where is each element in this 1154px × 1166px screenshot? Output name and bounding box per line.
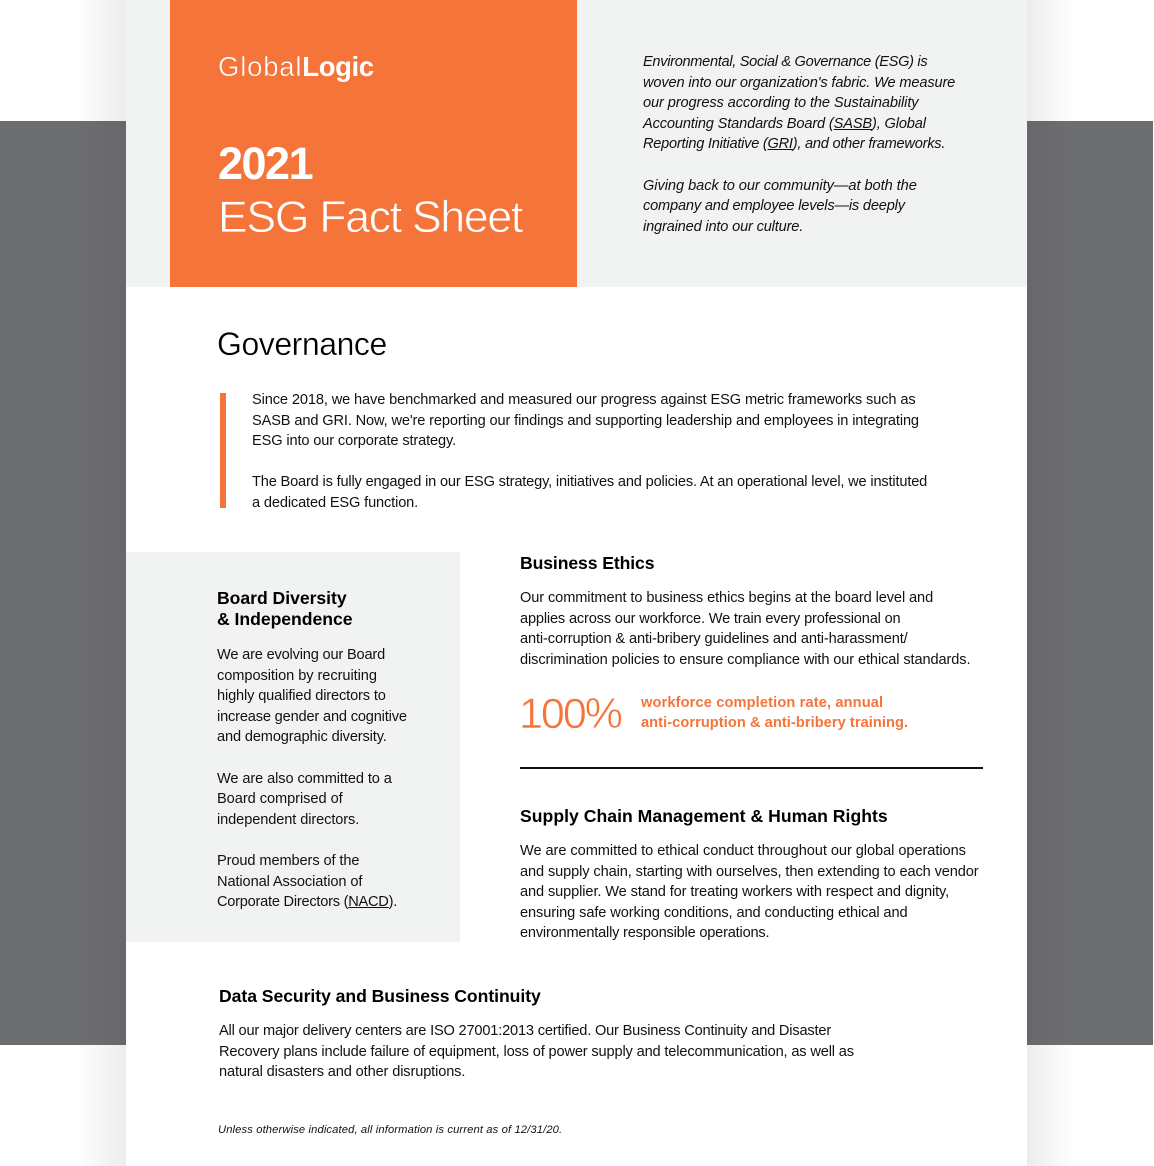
intro text [642,54,955,235]
supply chain text: and supplier. We stand for treating workers with respect and dignity, [520,884,949,900]
page shadows [0,0,1154,121]
board diversity text: Board comprised of [217,791,343,807]
logo: GlobalLogic [218,51,374,82]
supply chain text: environmentally responsible operations. [520,925,769,941]
governance text: Since 2018, we have benchmarked and measured our progress against ESG metric frameworks such as [252,392,916,408]
title [218,138,523,242]
governance text: The Board is fully engaged in our ESG strategy, initiatives and policies. At an operational level, we instituted [252,474,927,490]
heading: data security: Data Security and Business Continuity [219,986,541,1006]
business ethics text: anti-corruption & anti-bribery guidelines and anti-harassment/ [520,631,908,647]
heading: board diversity: & Independence [217,609,352,629]
panel: header orange [170,0,577,287]
governance text: SASB and GRI. Now, we're reporting our findings and supporting leadership and employees in integrating [252,413,919,429]
governance text: ESG into our corporate strategy. [252,433,456,449]
board diversity text: independent directors. [217,812,359,828]
heading: board diversity: Board Diversity [217,588,347,608]
board diversity text: composition by recruiting [217,668,377,684]
footnote: Unless otherwise indicated, all information is current as of 12/31/20. [218,1124,562,1136]
board diversity text: We are evolving our Board [217,647,385,663]
board diversity text: Corporate Directors (NACD). [217,894,397,910]
business ethics text: discrimination policies to ensure compliance with our ethical standards. [520,652,970,668]
governance text: a dedicated ESG function. [252,495,418,511]
board diversity text: and demographic diversity. [217,729,387,745]
data security text: All our major delivery centers are ISO 27001:2013 certified. Our Business Continuity and Disaster [219,1023,831,1039]
board diversity text: Proud members of the [217,853,359,869]
supply chain text: ensuring safe working conditions, and conducting ethical and [520,905,907,921]
heading: board diversity [217,588,352,629]
divider [520,767,983,769]
intro text: Accounting Standards Board (SASB), Global [643,116,926,132]
board diversity text [217,647,407,910]
stat caption: anti-corruption & anti-bribery training. [641,715,908,731]
intro text: Reporting Initiative (GRI), and other frameworks. [643,136,945,152]
panel: board diversity [126,552,460,942]
data security text: natural disasters and other disruptions. [219,1064,465,1080]
intro text: Giving back to our community—at both the [643,178,917,194]
supply chain text: We are committed to ethical conduct throughout our global operations [520,843,966,859]
intro text: our progress according to the Sustainability [643,95,918,111]
board diversity text: increase gender and cognitive [217,709,407,725]
supply chain text [520,843,979,941]
stat caption [641,694,908,731]
data security text [219,1023,854,1080]
board diversity text: National Association of [217,874,362,890]
stat: 100%: 100% [519,690,621,738]
business ethics text: applies across our workforce. We train every professional on [520,611,900,627]
heading: supply chain: Supply Chain Management & Human Rights [520,806,888,826]
board diversity text: highly qualified directors to [217,688,386,704]
business ethics text: Our commitment to business ethics begins at the board level and [520,590,933,606]
data security text: Recovery plans include failure of equipment, loss of power supply and telecommunication, as well as [219,1044,854,1060]
panel: header grey [126,0,1027,287]
business ethics text [520,590,970,668]
governance text [252,392,927,511]
title: ESG Fact Sheet [218,193,522,242]
intro text: Environmental, Social & Governance (ESG) is [643,54,927,70]
lower page shadows [0,1045,1154,1166]
backdrop band [0,121,1153,1045]
stat caption: workforce completion rate, annual [641,694,883,710]
heading: Governance: Governance [217,326,387,362]
intro text: ingrained into our culture. [643,219,803,235]
supply chain text: and supply chain, starting with ourselves, then extending to each vendor [520,864,979,880]
intro text: company and employee levels—is deeply [643,198,905,214]
heading: business ethics: Business Ethics [520,553,654,573]
panel: page sheet [126,0,1027,1166]
intro text: woven into our organization's fabric. We measure [643,75,955,91]
accent bar [220,393,226,508]
board diversity text: We are also committed to a [217,771,392,787]
title: 2021 [218,138,312,189]
